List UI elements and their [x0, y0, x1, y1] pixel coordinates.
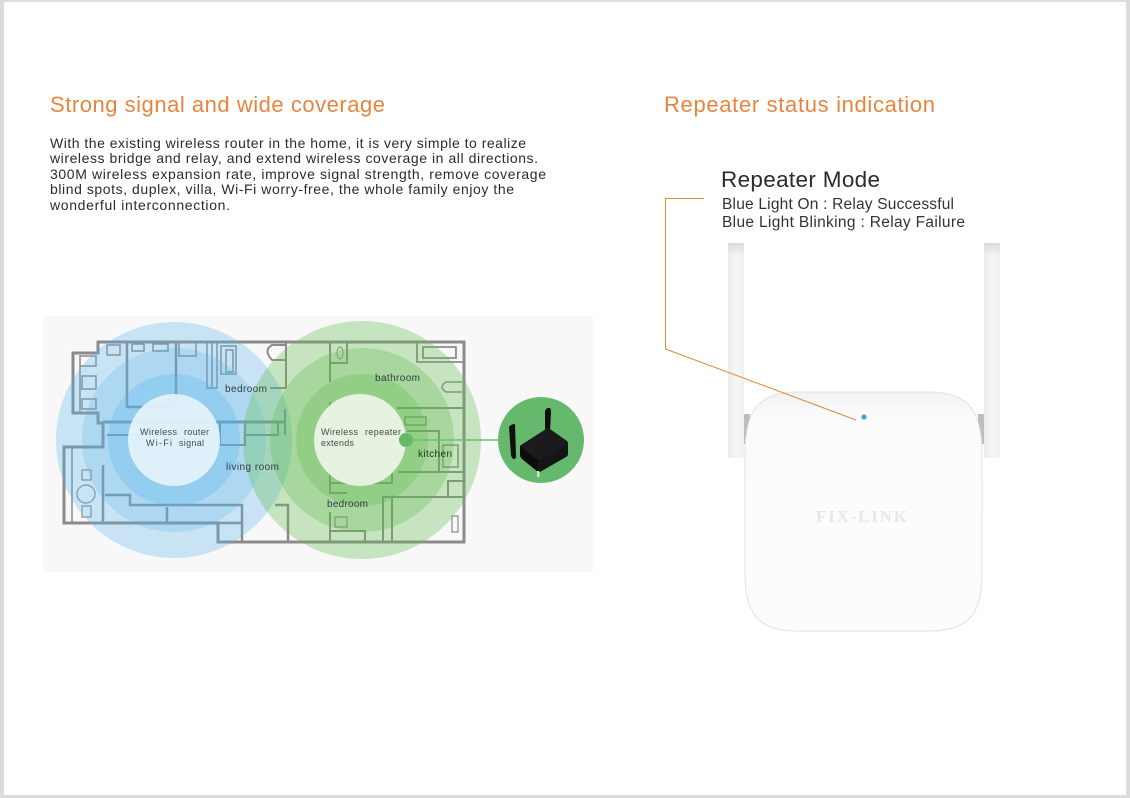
- callout status lines: Blue Light Blinking : Relay Failure: [722, 214, 965, 231]
- router circle label: Wi-Fi: [146, 438, 172, 448]
- device left face: [520, 446, 539, 472]
- text block: coverage description: With the existing wireless router in the home, it is very simple to realize: [50, 135, 526, 151]
- status LED: [861, 414, 867, 420]
- connector from repeater to product: [399, 433, 500, 447]
- router circle label: router: [184, 427, 209, 437]
- callout status lines: [722, 196, 965, 231]
- repeater circle label: Wireless: [321, 427, 358, 437]
- antenna hinges: [744, 414, 984, 444]
- router circle label: [140, 427, 209, 448]
- heading: Repeater status indication: Repeater status indication: [664, 92, 935, 117]
- icon: black repeater in green circle: [498, 397, 584, 483]
- callout leader line: [666, 198, 856, 420]
- panel: coverage floor plan diagram: [43, 316, 593, 572]
- room labels: bathroom: [375, 373, 420, 384]
- room labels: living room: [226, 462, 279, 473]
- room labels: kitchen: [418, 449, 452, 460]
- callout status lines: Blue Light On : Relay Successful: [722, 196, 954, 213]
- repeater circle label: extends: [321, 438, 354, 448]
- brand logo: FIX-LINK: [816, 507, 908, 526]
- text block: coverage description: wireless bridge and relay, and extend wireless coverage in all directions.: [49, 150, 538, 166]
- room labels: bedroom: [327, 499, 368, 510]
- green repeater coverage rings: [243, 321, 481, 559]
- left antenna: [728, 243, 744, 458]
- floor plan walls: [64, 342, 464, 542]
- left antenna: [509, 424, 516, 459]
- text block: coverage description: [49, 135, 546, 213]
- blue Wi-Fi coverage rings: [56, 322, 292, 558]
- callout: repeater mode: [721, 167, 965, 231]
- right antenna: [984, 243, 1000, 458]
- room labels: bedroom: [225, 384, 267, 395]
- router circle label: signal: [179, 438, 204, 448]
- text block: coverage description: wonderful interconnection.: [49, 197, 230, 213]
- heading: Strong signal and wide coverage: Strong signal and wide coverage: [50, 92, 385, 117]
- callout title: Repeater Mode: [721, 167, 880, 192]
- room labels: [225, 373, 452, 510]
- device body: [745, 392, 982, 631]
- right antenna: [545, 408, 551, 434]
- device right face: [538, 443, 568, 472]
- repeater circle label: repeater: [365, 427, 401, 437]
- text block: coverage description: 300M wireless expansion rate, improve signal strength, remove coverage: [50, 166, 546, 182]
- text block: coverage description: blind spots, duplex, villa, Wi-Fi worry-free, the whole family enjoy the: [50, 181, 514, 197]
- repeater circle label: [321, 427, 401, 448]
- router circle label: Wireless: [140, 427, 178, 437]
- device top face: [520, 428, 568, 462]
- icon: white repeater product: [728, 243, 1000, 631]
